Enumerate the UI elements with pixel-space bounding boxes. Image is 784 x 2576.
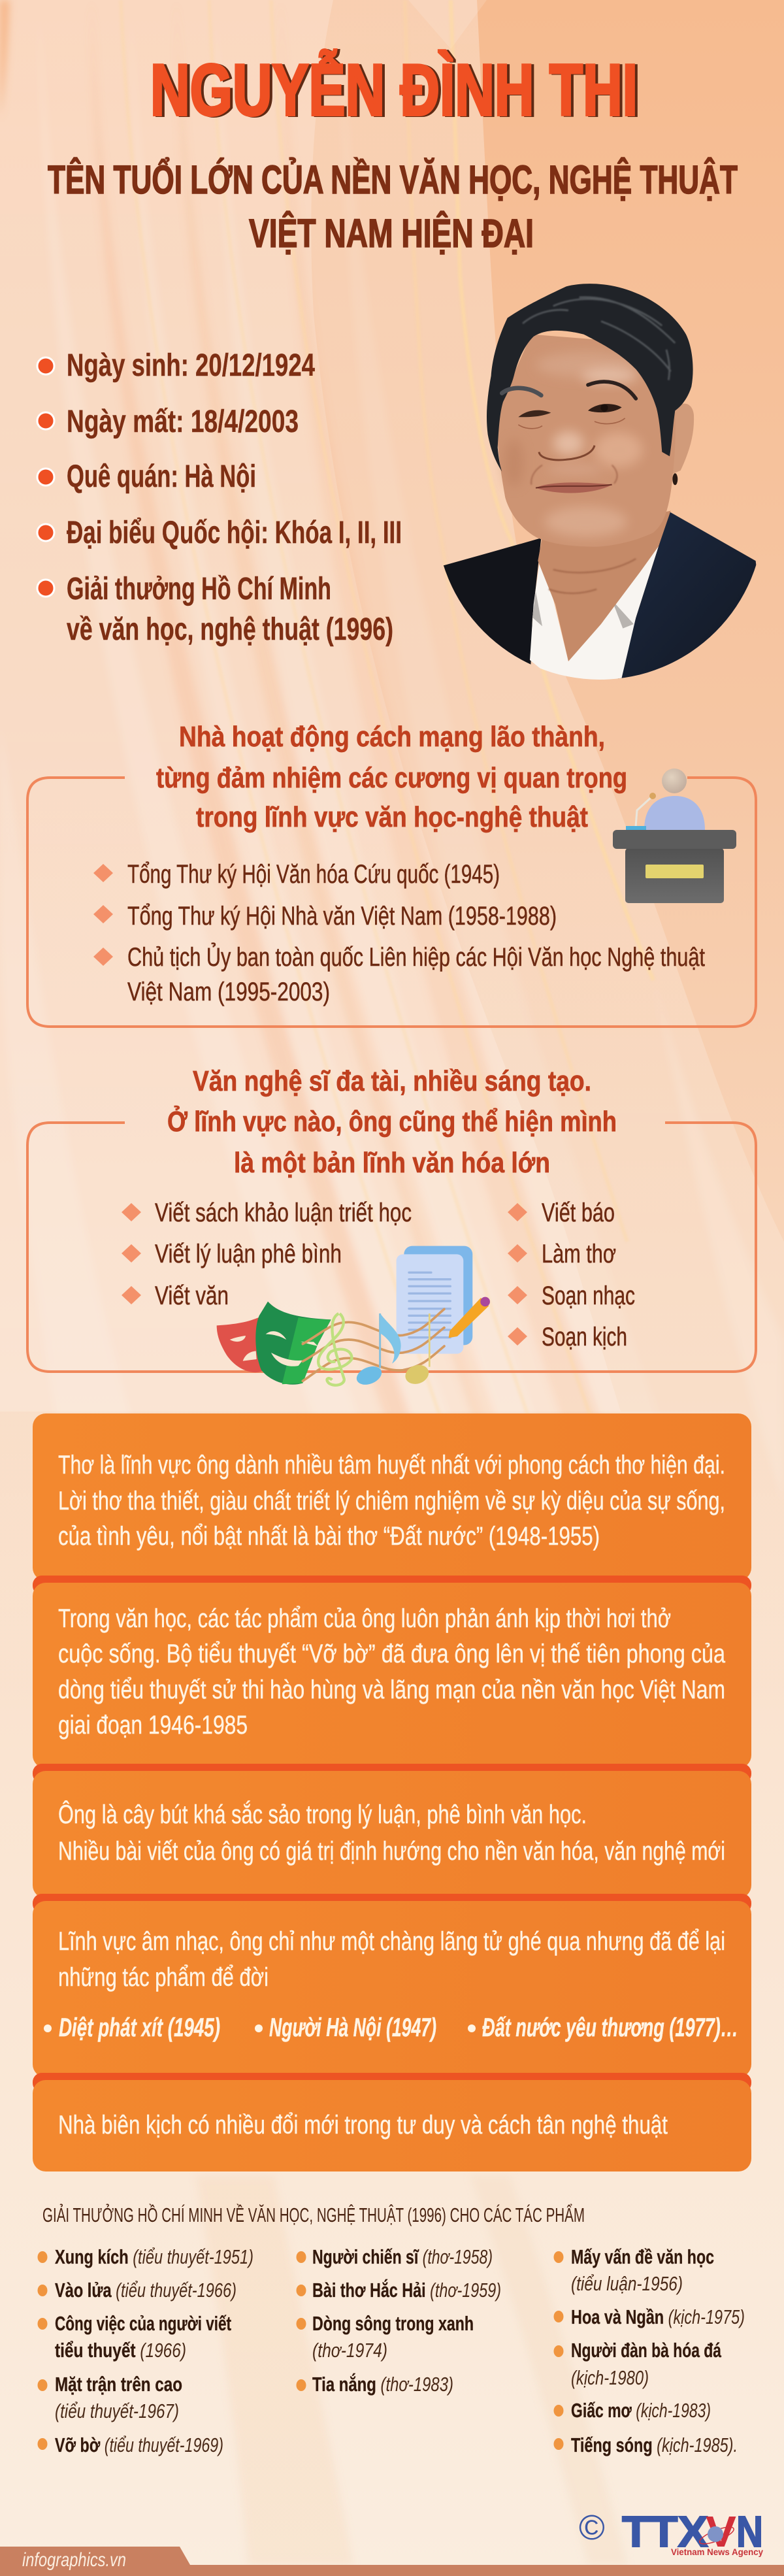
heading: career	[156, 721, 627, 833]
icon: speaker at podium	[613, 768, 736, 903]
talents list	[122, 1198, 635, 1351]
icon: masks, music and document	[217, 1246, 490, 1388]
talents list: Làm thơ	[542, 1240, 616, 1268]
awards list column 3: Hoa và Ngần (kịch-1975)	[571, 2305, 745, 2328]
logo: TTXVN: ©	[579, 2508, 605, 2547]
biography facts list: Quê quán: Hà Nội	[67, 459, 256, 494]
talents list: Viết sách khảo luận triết học	[155, 1198, 412, 1227]
awards list column 1: (tiểu thuyết-1967)	[55, 2400, 179, 2422]
panel: literature: giai đoạn 1946-1985	[58, 1711, 248, 1740]
talents list: Viết văn	[155, 1281, 229, 1310]
awards list column 3: Tiếng sóng (kịch-1985).	[571, 2434, 738, 2456]
talents list: Soạn nhạc	[542, 1281, 635, 1310]
panel: criticism	[33, 1764, 751, 1898]
subtitle: VIỆT NAM HIỆN ĐẠI	[249, 211, 534, 256]
panel: revolutionary career	[27, 721, 756, 1027]
awards list column 1: Vỡ bờ (tiểu thuyết-1969)	[55, 2434, 223, 2456]
talents list: Viết lý luận phê bình	[155, 1240, 342, 1268]
panel: music: những tác phẩm để đời	[58, 1963, 269, 1992]
biography facts list: Ngày mất: 18/4/2003	[67, 405, 299, 439]
panel: talents	[27, 1065, 756, 1388]
awards list column 2: Bài thơ Hắc Hải (thơ-1959)	[312, 2278, 501, 2302]
awards list column 1: Vào lửa (tiểu thuyết-1966)	[55, 2279, 237, 2302]
subtitle	[48, 157, 738, 256]
footer bar: infographics.vn	[22, 2549, 126, 2571]
panel: literature	[33, 1576, 751, 1768]
awards list column 3: Giấc mơ (kịch-1983)	[571, 2399, 711, 2422]
panel: playwriting	[33, 2073, 751, 2171]
awards list column 2: (thơ-1974)	[312, 2339, 387, 2362]
career list: Tổng Thư ký Hội Văn hóa Cứu quốc (1945)	[127, 860, 500, 889]
awards list column 1: Công việc của người viết	[55, 2312, 231, 2335]
panel: music	[33, 1894, 751, 2077]
panel: poetry: của tình yêu, nổi bật nhất là bài thơ “Đất nước” (1948-1955)	[58, 1522, 600, 1551]
panel: criticism: Ông là cây bút khá sắc sảo trong lý luận, phê bình văn học.	[58, 1800, 587, 1829]
biography facts list: về văn học, nghệ thuật (1996)	[67, 612, 393, 647]
portrait photo	[443, 284, 757, 680]
logo: TTXVN: Vietnam News Agency	[671, 2547, 763, 2557]
awards list column 2	[297, 2245, 501, 2396]
awards list column 1: Xung kích (tiểu thuyết-1951)	[55, 2245, 253, 2268]
talents list: Soạn kịch	[542, 1323, 627, 1351]
awards list column 3: (tiểu luận-1956)	[571, 2272, 683, 2295]
awards list column 2: Tia nắng (thơ-1983)	[312, 2372, 453, 2396]
biography facts list: Giải thưởng Hồ Chí Minh	[67, 572, 331, 606]
awards list column 2: Người chiến sĩ (thơ-1958)	[312, 2245, 493, 2268]
career list: Tổng Thư ký Hội Nhà văn Việt Nam (1958-1988)	[127, 902, 557, 931]
heading: career: Nhà hoạt động cách mạng lão thành,	[179, 721, 605, 753]
awards list column 1: tiểu thuyết (1966)	[55, 2339, 186, 2362]
music works	[44, 2013, 738, 2042]
heading: career: từng đảm nhiệm các cương vị quan trọng	[156, 762, 627, 794]
biography facts list: Ngày sinh: 20/12/1924	[67, 348, 315, 383]
heading: talents: Văn nghệ sĩ đa tài, nhiều sáng tạo.	[193, 1065, 591, 1097]
logo: TTXVN: N	[736, 2507, 763, 2556]
music works: Người Hà Nội (1947)	[269, 2013, 436, 2042]
heading: talents: Ở lĩnh vực nào, ông cũng thể hiện mình	[167, 1104, 617, 1138]
music works: Diệt phát xít (1945)	[59, 2013, 220, 2042]
talents list: Viết báo	[542, 1198, 615, 1227]
biography facts list: Đại biểu Quốc hội: Khóa I, II, III	[67, 516, 402, 550]
career list: Việt Nam (1995-2003)	[127, 978, 330, 1006]
awards list column 3: (kịch-1980)	[571, 2366, 649, 2389]
career list	[93, 860, 705, 1006]
panel: poetry	[33, 1413, 751, 1581]
awards list column 3: Người đàn bà hóa đá	[571, 2339, 722, 2362]
logo: TTXVN: TTX	[622, 2507, 708, 2556]
awards list column 1: Mặt trận trên cao	[55, 2373, 182, 2396]
heading: talents: là một bản lĩnh văn hóa lớn	[234, 1147, 550, 1179]
awards list column 3: Mấy vấn đề văn học	[571, 2245, 714, 2268]
awards list column 1	[38, 2245, 253, 2456]
heading: talents	[167, 1065, 617, 1179]
title: NGUYỄN ĐÌNH THI	[150, 50, 638, 131]
awards list column 2: Dòng sông trong xanh	[312, 2312, 474, 2335]
logo: TTXVN	[579, 2507, 763, 2557]
biography facts list	[37, 348, 402, 647]
awards list column 3	[554, 2245, 745, 2456]
footer bar	[0, 2547, 784, 2576]
logo: TTXVN: V	[706, 2507, 736, 2556]
heading: career: trong lĩnh vực văn học-nghệ thuật	[196, 801, 588, 833]
